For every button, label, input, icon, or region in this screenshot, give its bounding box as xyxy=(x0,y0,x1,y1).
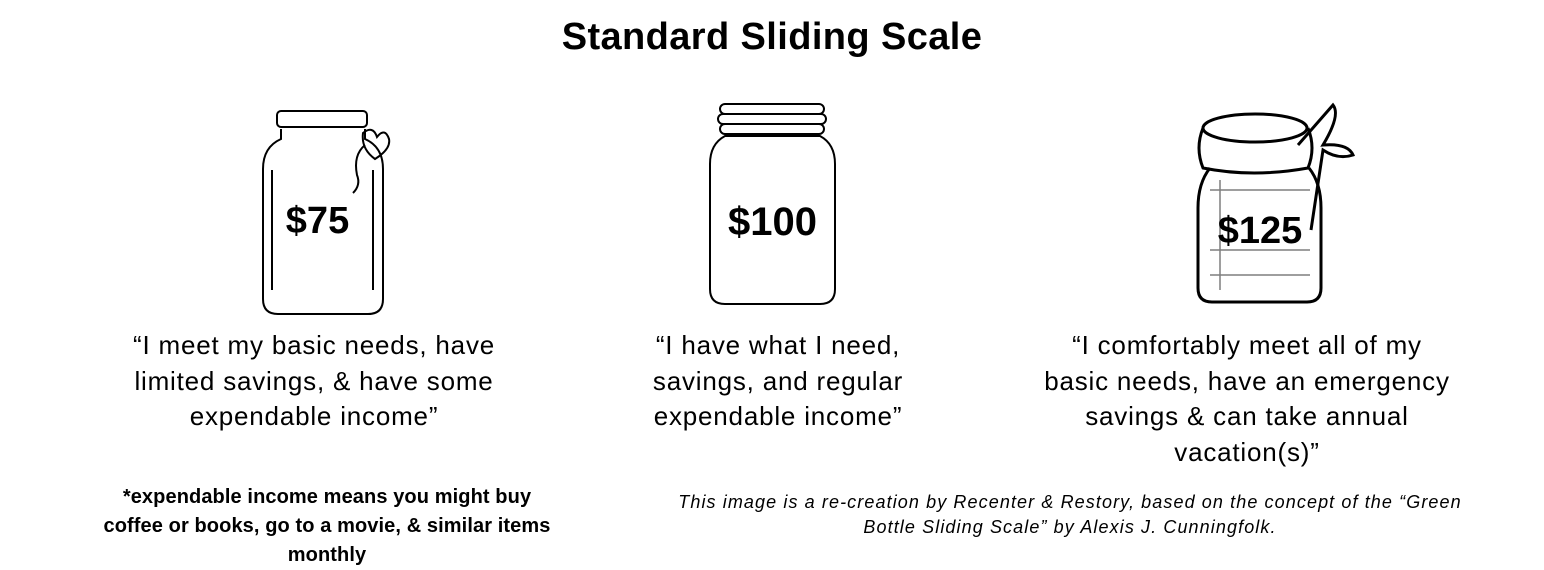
credit xyxy=(678,492,1462,537)
footnote xyxy=(103,486,551,566)
quote 1: “I meet my basic needs, have xyxy=(133,330,495,360)
quote 2: savings, and regular xyxy=(653,366,903,396)
quote 3: savings & can take annual xyxy=(1085,401,1409,431)
label $75: $75 xyxy=(286,200,349,242)
footnote: coffee or books, go to a movie, & similar items xyxy=(103,515,551,537)
quote 1: limited savings, & have some xyxy=(134,366,494,396)
quote 2: “I have what I need, xyxy=(656,330,900,360)
jar 2 xyxy=(709,103,836,305)
jar 1 xyxy=(262,110,390,315)
label $100: $100 xyxy=(728,200,817,244)
quote 2 xyxy=(653,330,903,431)
quote 1: expendable income” xyxy=(190,401,438,431)
jar 3 xyxy=(1196,102,1355,304)
quote 3: vacation(s)” xyxy=(1174,436,1320,466)
label $125: $125 xyxy=(1218,210,1302,252)
quote 2: expendable income” xyxy=(654,401,902,431)
quote 1 xyxy=(133,330,495,431)
credit: This image is a re-creation by Recenter & Restory, based on the concept of the “Green xyxy=(678,492,1462,512)
quote 3: “I comfortably meet all of my xyxy=(1072,330,1422,360)
quote 3 xyxy=(1044,330,1450,466)
credit: Bottle Sliding Scale” by Alexis J. Cunningfolk. xyxy=(863,517,1277,537)
footnote: *expendable income means you might buy xyxy=(123,486,531,508)
footnote: monthly xyxy=(288,544,366,566)
quote 3: basic needs, have an emergency xyxy=(1044,366,1450,396)
title: Standard Sliding Scale xyxy=(562,16,982,58)
